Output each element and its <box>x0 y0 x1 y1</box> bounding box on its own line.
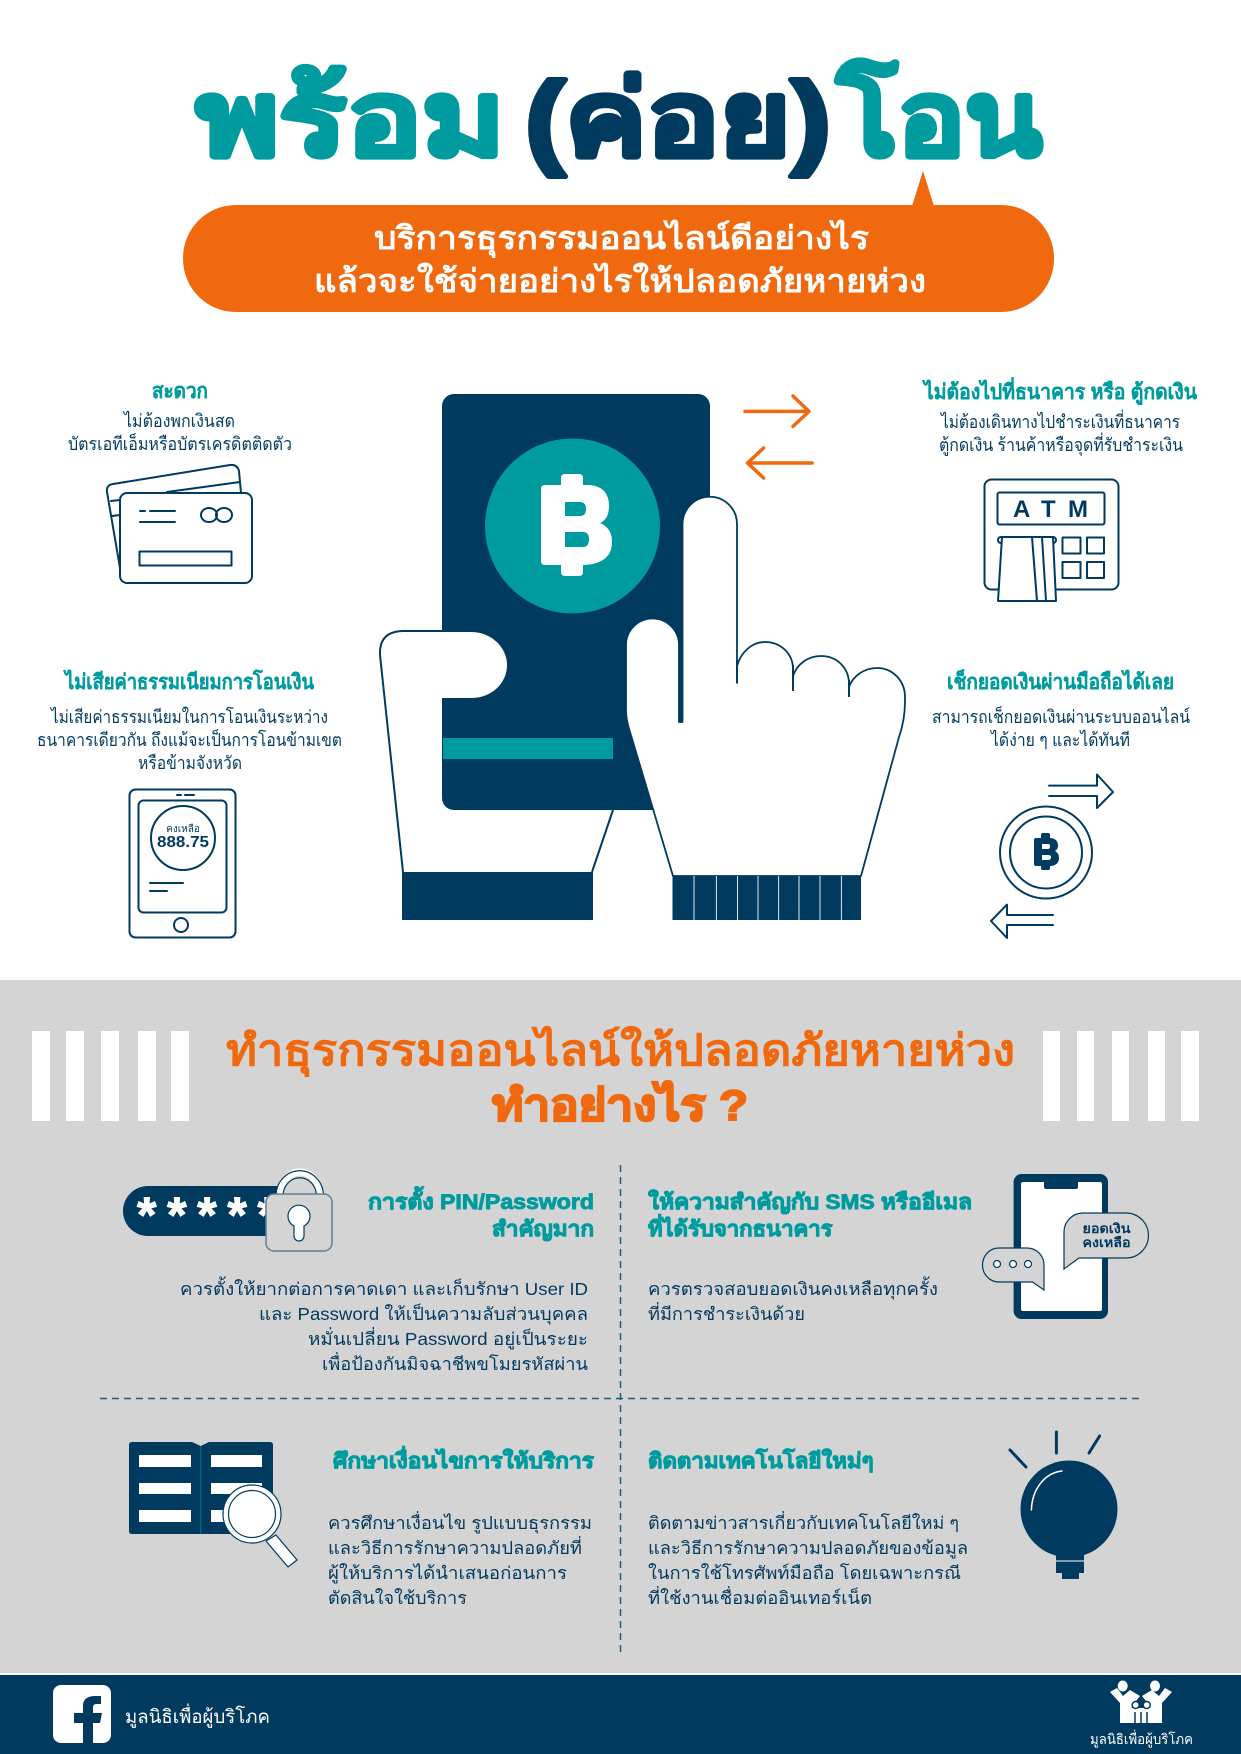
icon: tablet with balance: คงเหลือ <box>166 823 200 835</box>
panel: follow new technology <box>648 1432 1118 1608</box>
panel: no transfer fee: ไม่เสียค่าธรรมเนียมการโอนเงิน <box>63 669 315 694</box>
icon: coin with arrows <box>991 774 1113 938</box>
panel: follow new technology: ติดตามข่าวสารเกี่ยวกับเทคโนโลยีใหม่ ๆ <box>648 1511 959 1533</box>
title: พร้อม <box>196 62 505 178</box>
panel: follow new technology: ติดตามเทคโนโลยีใหม่ๆ <box>648 1448 874 1473</box>
panel: follow new technology: ในการใช้โทรศัพท์มือถือ โดยเฉพาะกรณี <box>648 1563 961 1583</box>
panel: no transfer fee: ไม่เสียค่าธรรมเนียมในการโอนเงินระหว่าง <box>49 706 328 727</box>
teal bar <box>443 738 613 759</box>
panel: SMS and email: ที่มีการชำระเงินด้วย <box>648 1302 805 1324</box>
panel: no transfer fee: ธนาคารเดียวกัน ถึงแม้จะเป็นการโอนข้ามเขต <box>37 728 342 750</box>
panel: convenient: สะดวก <box>152 380 208 403</box>
panel: PIN and password <box>123 1171 594 1374</box>
icon: ATM <box>984 480 1118 601</box>
panel: study terms of service: ตัดสินใจใช้บริการ <box>328 1588 467 1608</box>
callout: subtitle speech bubble <box>183 171 1054 312</box>
panel: gray safety section background <box>0 980 1241 1673</box>
icon: password lock: ***** <box>137 1187 278 1243</box>
panel: no need to go to bank: ไม่ต้องเดินทางไปชำระเงินที่ธนาคาร <box>939 409 1180 432</box>
panel: no need to go to bank <box>922 376 1198 601</box>
icon: baht symbol <box>541 474 612 576</box>
panel: PIN and password: สำคัญมาก <box>492 1218 594 1242</box>
icon: password lock <box>123 1171 332 1251</box>
left hand <box>380 631 613 872</box>
panel: check balance by mobile <box>932 668 1190 938</box>
right hand <box>626 497 905 876</box>
panel: follow new technology: และวิธีการรักษาความปลอดภัยของข้อมูล <box>648 1538 968 1559</box>
panel: SMS and email <box>648 1174 1148 1324</box>
panel: study terms of service: ควรศึกษาเงื่อนไข รูปแบบธุรกรรม <box>328 1511 592 1534</box>
panel: PIN and password: การตั้ง PIN/Password <box>368 1186 594 1214</box>
panel: no transfer fee <box>37 669 342 938</box>
panel: no need to go to bank: ไม่ต้องไปที่ธนาคาร หรือ ตู้กดเงิน <box>922 376 1198 406</box>
panel: check balance by mobile: เช็กยอดเงินผ่านมือถือได้เลย <box>947 668 1174 694</box>
title <box>196 59 1042 178</box>
title: โอน <box>836 59 1042 178</box>
panel: convenient <box>68 380 292 583</box>
panel: SMS and email: ควรตรวจสอบยอดเงินคงเหลือทุกครั้ง <box>648 1276 938 1300</box>
icon: credit cards <box>107 465 252 583</box>
panel: study terms of service: และวิธีการรักษาความปลอดภัยที่ <box>328 1536 582 1558</box>
icon: phone with message bubbles: คงเหลือ <box>1082 1235 1130 1250</box>
coin circle <box>485 438 660 614</box>
panel: PIN and password: ควรตั้งให้ยากต่อการคาดเดา และเก็บรักษา User ID <box>180 1276 588 1299</box>
right cuff <box>672 876 861 920</box>
title: (ค่อย) <box>525 62 831 178</box>
panel: PIN and password: หมั่นเปลี่ยน Password อยู่เป็นระยะ <box>308 1327 588 1350</box>
panel: SMS and email: ให้ความสำคัญกับ SMS หรืออีเมล <box>648 1189 972 1215</box>
panel: convenient: ไม่ต้องพกเงินสด <box>122 410 235 431</box>
panel: PIN and password: และ Password ให้เป็นความลับส่วนบุคคล <box>259 1303 588 1325</box>
panel: PIN and password: เพื่อป้องกันมิจฉาชีพขโมยรหัสผ่าน <box>322 1352 588 1374</box>
callout: subtitle speech bubble: บริการธุรกรรมออนไลน์ดีอย่างไร <box>374 219 869 259</box>
panel: SMS and email: ที่ได้รับจากธนาคาร <box>648 1213 833 1241</box>
panel: check balance by mobile: สามารถเช็กยอดเงินผ่านระบบออนไลน์ <box>932 705 1190 727</box>
logo: foundation <box>1110 1680 1172 1723</box>
phone <box>442 394 710 810</box>
icon: facebook <box>53 1685 111 1743</box>
icon: phone with message bubbles: ยอดเงิน <box>1082 1221 1131 1236</box>
arrow: left <box>748 448 812 478</box>
section heading: ทำธุรกรรมออนไลน์ให้ปลอดภัยหายห่วง <box>226 1026 1015 1077</box>
icon: tablet with balance <box>130 790 236 938</box>
panel: study terms of service <box>129 1442 595 1608</box>
section heading stripes right <box>1043 1031 1199 1121</box>
panel: convenient: บัตรเอทีเอ็มหรือบัตรเครดิตติดตัว <box>68 432 292 454</box>
icon: phone with message bubbles <box>982 1174 1148 1319</box>
left thumb <box>438 632 507 698</box>
section heading <box>226 1026 1015 1130</box>
panel: check balance by mobile: ได้ง่าย ๆ และได้ทันที <box>989 729 1130 750</box>
icon: ATM: ATM <box>1013 496 1088 523</box>
footer: มูลนิธิเพื่อผู้บริโภค <box>1090 1730 1193 1748</box>
icon: tablet with balance: 888.75 <box>157 834 209 851</box>
panel: follow new technology: ที่ใช้งานเชื่อมต่ออินเทอร์เน็ต <box>648 1586 872 1608</box>
section heading stripes left <box>32 1031 189 1121</box>
footer <box>0 1675 1241 1754</box>
panel: no need to go to bank: ตู้กดเงิน ร้านค้าหรือจุดที่รับชำระเงิน <box>939 432 1183 456</box>
panel: no transfer fee: หรือข้ามจังหวัด <box>138 753 242 773</box>
left cuff <box>402 872 593 920</box>
footer: มูลนิธิเพื่อผู้บริโภค <box>125 1703 270 1728</box>
icon: light bulb <box>1010 1432 1118 1579</box>
section heading: ทำอย่างไร ? <box>492 1080 748 1130</box>
illustration: hands holding phone <box>380 394 905 920</box>
icon: book with magnifier <box>129 1442 297 1567</box>
callout: subtitle speech bubble: แล้วจะใช้จ่ายอย่างไรให้ปลอดภัยหายห่วง <box>314 262 926 299</box>
panel: study terms of service: ผู้ให้บริการได้นำเสนอก่อนการ <box>328 1563 567 1584</box>
arrow: right <box>745 396 809 426</box>
panel: study terms of service: ศึกษาเงื่อนไขการให้บริการ <box>333 1445 595 1473</box>
